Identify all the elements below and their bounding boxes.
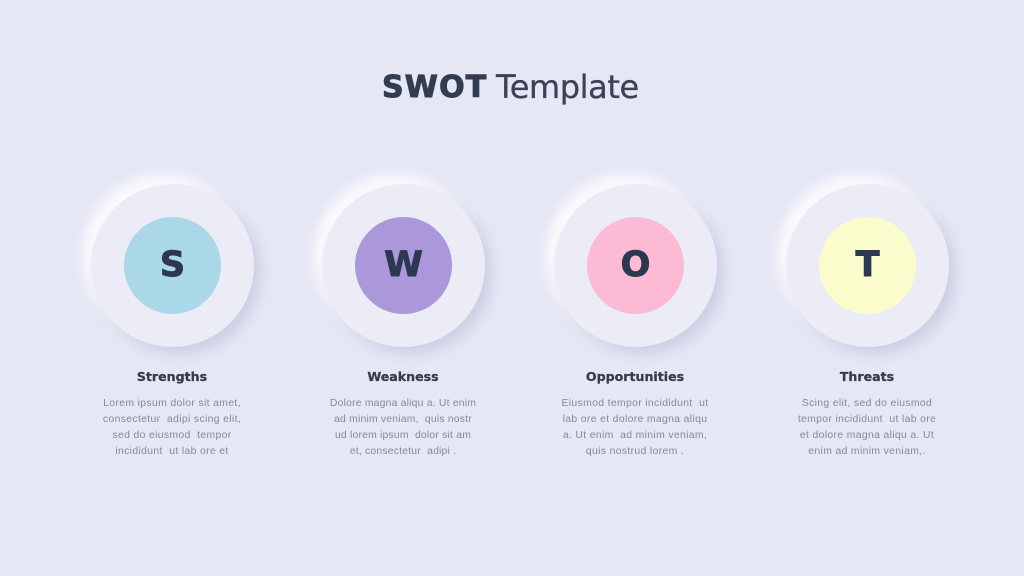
text block: weakness: et, consectetur adipi . bbox=[350, 446, 456, 457]
panel: opportunities bbox=[545, 174, 727, 457]
text block: weakness: Dolore magna aliqu a. Ut enim bbox=[330, 398, 476, 409]
text block: opportunities: quis nostrud lorem . bbox=[586, 446, 684, 457]
title: Template bbox=[496, 68, 639, 106]
panel: strengths bbox=[82, 174, 264, 457]
text block: weakness bbox=[330, 398, 476, 457]
panel: weakness bbox=[313, 174, 495, 457]
text block: threats bbox=[798, 398, 936, 457]
text block: threats: tempor incididunt ut lab ore bbox=[798, 414, 936, 425]
text block: strengths: Lorem ipsum dolor sit amet, bbox=[103, 398, 241, 409]
icon: S circle: S bbox=[160, 245, 185, 285]
icon: T circle bbox=[786, 184, 949, 347]
icon: S circle bbox=[91, 184, 254, 347]
icon: T circle: T bbox=[856, 245, 879, 285]
heading: strengths: Strengths bbox=[137, 369, 207, 384]
text block: weakness: ad minim veniam, quis nostr bbox=[334, 414, 472, 425]
panel: threats bbox=[777, 174, 959, 457]
text block: strengths bbox=[103, 398, 241, 457]
heading: weakness: Weakness bbox=[367, 369, 439, 384]
heading: opportunities: Opportunities bbox=[586, 369, 684, 384]
text block: opportunities bbox=[561, 398, 709, 457]
text block: strengths: sed do eiusmod tempor bbox=[112, 430, 232, 441]
text block: opportunities: lab ore et dolore magna aliqu bbox=[563, 414, 707, 425]
title bbox=[382, 68, 639, 106]
icon: W circle: W bbox=[384, 245, 423, 285]
text block: strengths: incididunt ut lab ore et bbox=[115, 446, 229, 457]
icon: W circle bbox=[322, 184, 485, 347]
text block: opportunities: a. Ut enim ad minim veniam, bbox=[563, 430, 707, 441]
text block: opportunities: Eiusmod tempor incididunt ut bbox=[561, 398, 709, 409]
text block: weakness: ud lorem ipsum dolor sit am bbox=[335, 430, 471, 441]
text block: threats: Scing elit, sed do eiusmod bbox=[802, 398, 932, 409]
heading: threats: Threats bbox=[840, 369, 894, 384]
text block: threats: et dolore magna aliqu a. Ut bbox=[800, 430, 934, 441]
text block: threats: enim ad minim veniam,. bbox=[808, 446, 926, 457]
title: SWOT bbox=[382, 70, 487, 105]
icon: O circle bbox=[554, 184, 717, 347]
icon: O circle: O bbox=[621, 245, 650, 285]
text block: strengths: consectetur adipi scing elit, bbox=[103, 414, 241, 425]
